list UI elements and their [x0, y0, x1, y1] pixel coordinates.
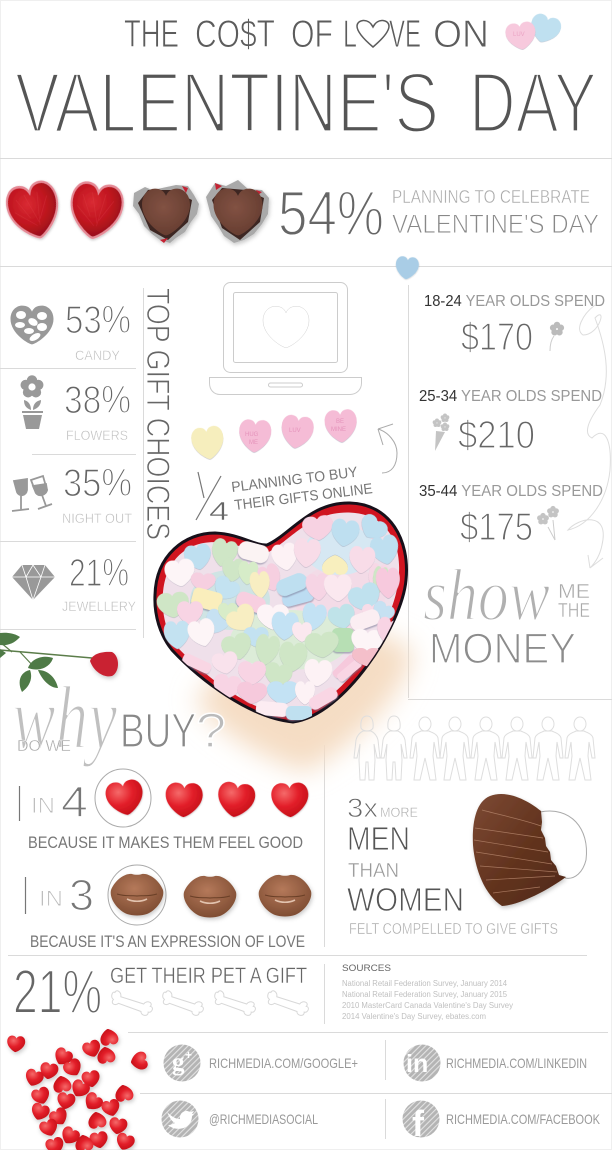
- stat: 1 in 4: 4: [61, 778, 88, 827]
- laptop outline with heart: [210, 282, 362, 394]
- stat: 1 in 3: 3: [69, 871, 94, 920]
- text: 3x more: 3x: [347, 793, 379, 823]
- text: 25-34 year olds spend: 25-34 YEAR OLDS SPEND: [419, 388, 602, 405]
- icon: facebook: [402, 1100, 440, 1144]
- stat: 35 percent night out: 35%: [63, 462, 132, 505]
- text: money: MONEY: [429, 625, 576, 673]
- panel: sources: [342, 963, 513, 1021]
- title: the cost of love on: THE: [124, 13, 179, 56]
- label: flowers: FLOWERS: [66, 427, 128, 443]
- candy heart: hug me: HUG: [245, 432, 259, 438]
- candy hearts row: [190, 409, 358, 461]
- title: valentine's day: VALENTINE'S: [15, 56, 439, 151]
- curly arrow: [568, 305, 610, 568]
- source list: 2010 MasterCard Canada Valentine's Day Survey: [342, 1001, 513, 1010]
- candy heart: hug me: [238, 419, 272, 453]
- people outlines: [354, 716, 595, 780]
- stat: one quarter: [196, 472, 229, 526]
- text: felt compelled to give gifts: FELT COMPELLED TO GIVE GIFTS: [349, 921, 558, 938]
- text: me the: THE: [558, 600, 590, 622]
- title: the cost of love on: ON: [433, 13, 489, 56]
- stat: one quarter: 4: [209, 496, 229, 526]
- text: 18-24 year olds spend: 18-24 YEAR OLDS SPEND: [424, 293, 605, 310]
- arrow: to laptop: [378, 424, 397, 473]
- icon: two candy hearts: [504, 12, 563, 51]
- panel: pets: [13, 958, 310, 1027]
- source list: National Retail Federation Survey, January 2014: [342, 979, 508, 988]
- text: me the: [558, 581, 590, 622]
- icon: facebook: f: [412, 1103, 425, 1144]
- icon: linkedin: in: [406, 1050, 428, 1078]
- panel: spend by age: [419, 293, 610, 673]
- icon: google plus: [164, 1044, 200, 1082]
- chocolate lips row: [111, 874, 311, 918]
- circle highlight: [95, 769, 151, 827]
- stat: 38 percent flowers: 38%: [64, 379, 131, 422]
- icon: rose: [0, 633, 118, 692]
- icon: two candy hearts: LUV: [513, 32, 525, 38]
- title: the cost of love on: CO$T: [195, 13, 275, 56]
- foil chocolate hearts row: [3, 179, 269, 243]
- icon: potted flower: [21, 375, 43, 429]
- text: women: WOMEN: [347, 881, 464, 918]
- heading: why do we buy: ?: [196, 705, 226, 758]
- bowl: [155, 503, 407, 722]
- stat: 21 percent jewellery: 21%: [69, 552, 129, 595]
- candy heart: yellow: [190, 425, 226, 461]
- bone outlines: [109, 989, 310, 1017]
- title: the cost of love on: VE: [389, 13, 421, 56]
- icon: linkedin: [404, 1044, 440, 1082]
- icon: unwrapped chocolate 2: [206, 180, 269, 243]
- icon: bouquet: [433, 414, 449, 451]
- panel: men vs women: MORE: [380, 804, 418, 820]
- link: google: RICHMEDIA.COM/GOOGLE+: [209, 1055, 358, 1071]
- icon: unwrapped chocolate 1: [133, 185, 199, 243]
- label: candy: CANDY: [75, 347, 121, 363]
- stat: 1 in 3: IN: [39, 886, 63, 911]
- candy heart: luv u: [279, 414, 315, 450]
- stat: 1 in 3: [26, 871, 94, 920]
- title: the cost of love on: L: [343, 13, 357, 56]
- stat: 170 dollars: $170: [461, 316, 533, 359]
- text: than: THAN: [348, 860, 399, 882]
- label: night out: NIGHT OUT: [62, 510, 132, 526]
- heading: why do we buy: why: [12, 669, 117, 768]
- icon: wine glasses: [12, 476, 52, 511]
- source list: 2014 Valentine's Day Survey, ebates.com: [342, 1012, 486, 1021]
- text: get their pet a gift: GET THEIR PET A GIFT: [110, 963, 307, 988]
- candy heart: be mine: [324, 409, 358, 443]
- icon: red foil heart 2: [67, 181, 125, 241]
- heading: why do we buy: BUY: [120, 705, 196, 758]
- text: men: MEN: [347, 820, 410, 857]
- icon: google plus: g: [172, 1049, 185, 1076]
- icon: small blue candy heart: [394, 256, 420, 280]
- panel: top gift choices: [10, 288, 176, 614]
- heart bowl of candy: [155, 503, 407, 722]
- source list: [342, 979, 513, 1021]
- source list: National Retail Federation Survey, January 2015: [342, 990, 508, 999]
- circle highlight: [108, 865, 166, 925]
- text: because it makes them feel good: BECAUSE IT MAKES THEM FEEL GOOD: [28, 834, 303, 852]
- text: me the: ME: [558, 581, 590, 603]
- bowl shadow: [195, 628, 412, 772]
- candy heart: be mine: MINE: [331, 427, 346, 433]
- stat: 1 in 4: [20, 778, 88, 827]
- stat: 1 in 4: IN: [31, 793, 55, 818]
- title: the cost of love on: [124, 13, 489, 56]
- link: twitter: @RICHMEDIASOCIAL: [209, 1111, 318, 1127]
- stat: 21 percent: 21%: [13, 958, 102, 1027]
- script word: show: show: [423, 555, 550, 637]
- text: planning to buy their gifts online: THEIR GIFTS ONLINE: [234, 481, 374, 514]
- stat: 175 dollars: $175: [460, 506, 533, 549]
- icon: two flowers: [537, 506, 559, 540]
- text: planning to buy their gifts online: [231, 465, 374, 514]
- panel: social links: [162, 1044, 601, 1144]
- candy heart: hug me: ME: [249, 440, 258, 446]
- panel: why do we buy: [12, 669, 311, 951]
- title: the cost of love on: OF: [291, 13, 333, 56]
- heading: top gift choices: TOP GIFT CHOICES: [140, 288, 176, 540]
- candy heart: be mine: BE: [336, 419, 344, 425]
- icon: diamond: [12, 565, 55, 600]
- gummy hearts row: [104, 778, 309, 820]
- red cinnamon candies: [6, 1027, 149, 1150]
- heading: why do we buy: DO WE: [17, 738, 71, 755]
- heading: why do we buy: [12, 669, 226, 768]
- icon: red foil heart 1: [3, 179, 65, 243]
- bitten chocolate heart: [473, 794, 587, 906]
- text: 35-44 year olds spend: 35-44 YEAR OLDS SPEND: [419, 483, 603, 500]
- label: jewellery: JEWELLERY: [62, 598, 137, 614]
- panel: men vs women: [347, 716, 595, 938]
- icon: google plus: +: [185, 1048, 192, 1062]
- candy pile: [156, 511, 403, 720]
- candy heart: luv u: LUV: [289, 428, 301, 434]
- text: because it's an expression of love: BECAUSE IT'S AN EXPRESSION OF LOVE: [30, 933, 305, 951]
- heading: sources: SOURCES: [342, 963, 391, 974]
- icon: single flower: [550, 322, 564, 351]
- stat: 53 percent candy: 53%: [65, 299, 131, 342]
- text: planning to buy their gifts online: PLANNING TO BUY: [231, 465, 359, 496]
- icon: twitter: [162, 1100, 198, 1138]
- stat: 54 percent: 54%: [278, 179, 384, 249]
- stat: 210 dollars: $210: [458, 414, 535, 457]
- icon: candy heart box: [10, 306, 54, 344]
